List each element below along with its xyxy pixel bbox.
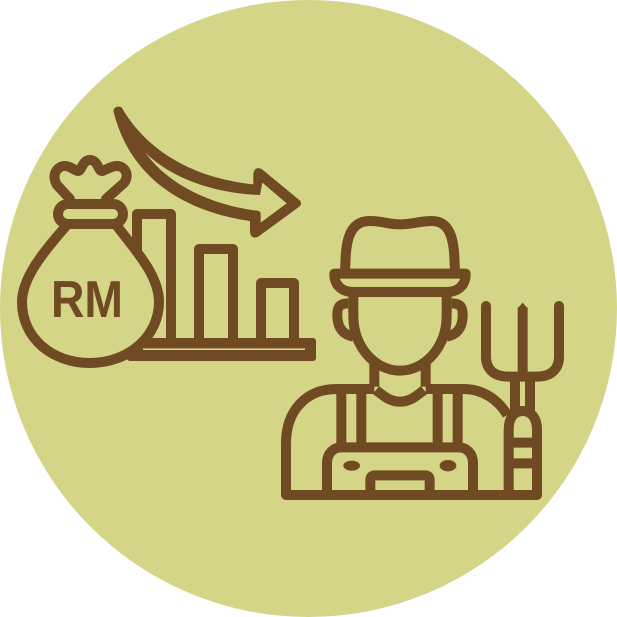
neck and collar — [374, 363, 426, 402]
icon: money bag — [22, 160, 159, 363]
currency label: RM — [51, 271, 123, 329]
icon: farmer — [286, 221, 559, 495]
icon: pitchfork — [486, 303, 559, 495]
body and overalls — [286, 389, 537, 495]
head and ears — [337, 293, 463, 371]
arrow: downward trend — [113, 107, 301, 238]
icon: bar chart — [127, 214, 316, 361]
hat — [334, 221, 466, 292]
